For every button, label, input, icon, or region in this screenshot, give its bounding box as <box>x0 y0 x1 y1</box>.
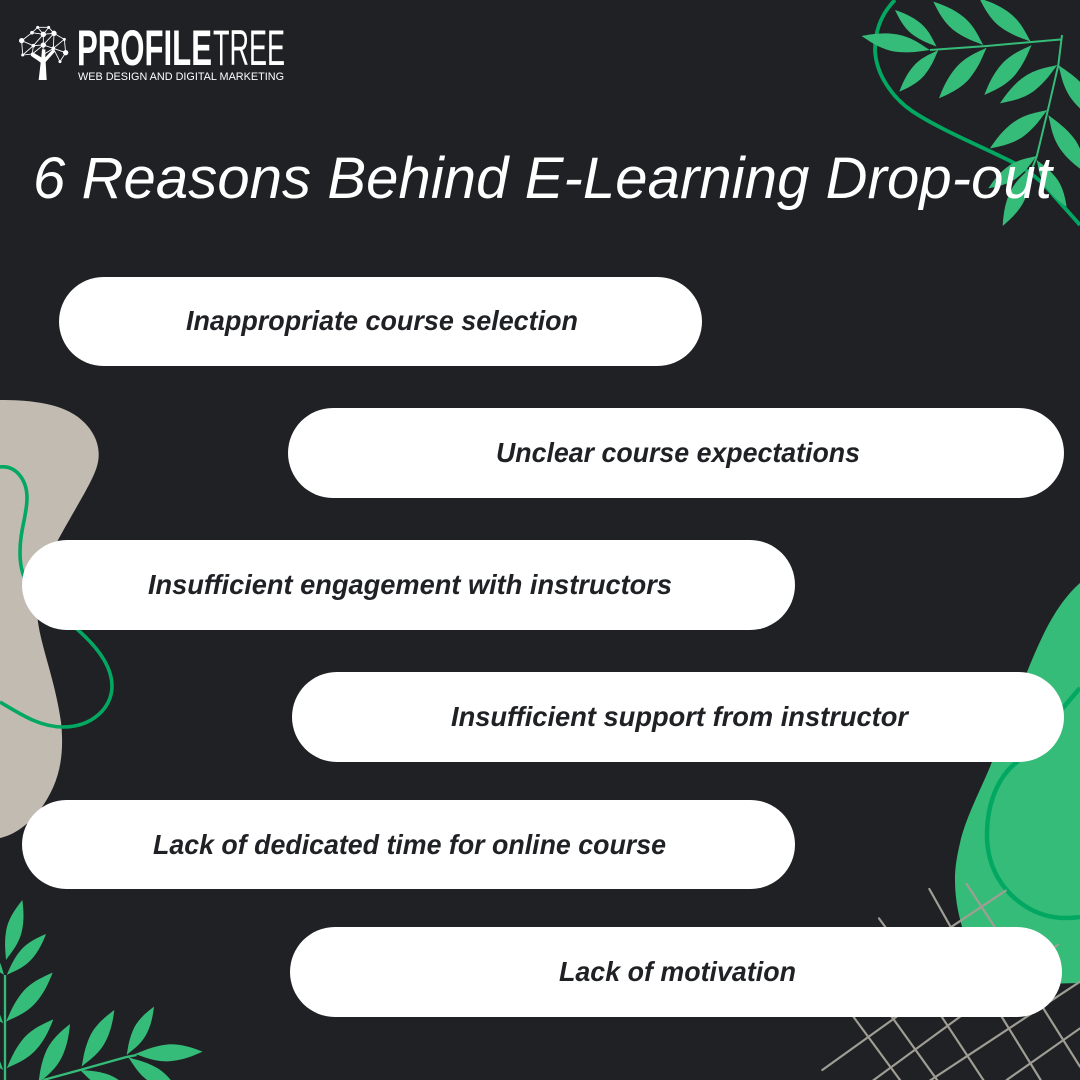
pill 6: motivation: Lack of motivation <box>559 956 796 987</box>
pill 3: engagement <box>22 540 795 630</box>
curve: right green line <box>987 688 1080 918</box>
title: 6 Reasons Behind E-Learning Drop-out <box>33 146 1055 211</box>
pill 1: course selection <box>59 277 702 366</box>
leaves: bottom left branches <box>0 898 203 1080</box>
curve: left green line <box>0 467 112 727</box>
logo: ProfileTree: TREE <box>213 20 285 76</box>
logo wordmark: PROFILE <box>77 20 212 76</box>
pill 4: support <box>292 672 1064 762</box>
icon: network tree <box>19 26 68 80</box>
pill 6: motivation <box>290 927 1062 1017</box>
pill 4: support: Insufficient support from instructor <box>451 701 910 732</box>
pill 2: course expectations <box>288 408 1064 498</box>
pill 3: engagement: Insufficient engagement with instructors <box>148 569 672 600</box>
pill 5: dedicated time <box>22 800 795 889</box>
pill 5: dedicated time: Lack of dedicated time for online course <box>153 829 666 860</box>
green blob: right <box>955 583 1080 985</box>
logo: ProfileTree <box>19 20 285 83</box>
beige blob: left <box>0 400 99 838</box>
leaves: top right branch <box>860 0 1080 230</box>
pill 2: course expectations: Unclear course expectations <box>496 437 860 468</box>
curve: top right green line <box>875 0 1080 225</box>
pill 1: course selection: Inappropriate course selection <box>186 305 578 336</box>
logo tagline: WEB DESIGN AND DIGITAL MARKETING <box>78 71 284 83</box>
grid lines: bottom right <box>822 884 1080 1080</box>
